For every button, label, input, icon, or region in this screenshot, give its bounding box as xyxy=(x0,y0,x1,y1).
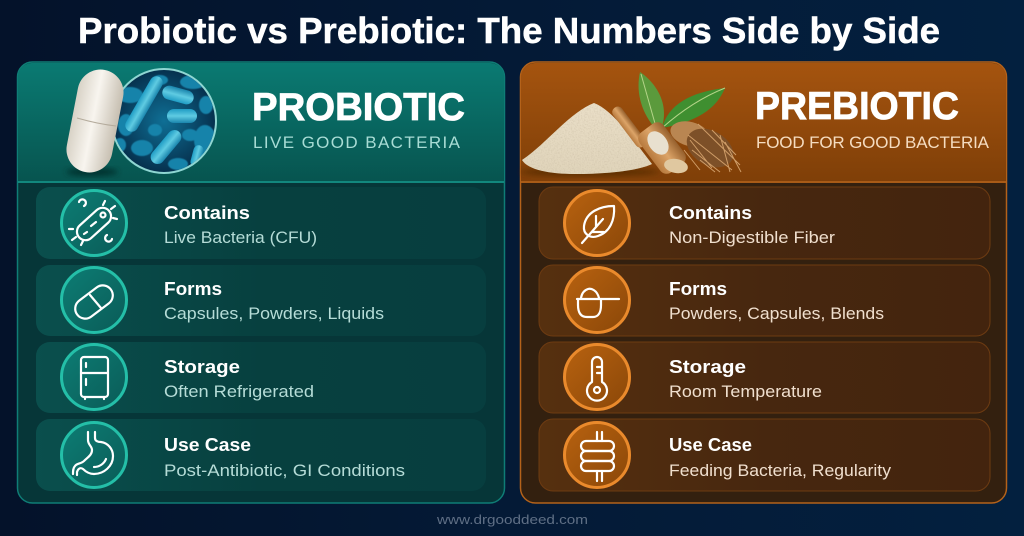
row: contains xyxy=(36,187,486,259)
panel background xyxy=(520,62,1006,503)
value: Capsules, Powders, Liquids xyxy=(164,304,384,323)
row: use case xyxy=(36,419,486,491)
label: Forms xyxy=(164,279,222,299)
footer: website: www.drgooddeed.com xyxy=(436,512,588,527)
label: Forms xyxy=(669,279,727,299)
label: Use Case xyxy=(164,435,251,455)
panel: prebiotic xyxy=(520,62,1006,503)
value: Feeding Bacteria, Regularity xyxy=(669,461,892,480)
icon: measuring scoop xyxy=(564,268,630,332)
row: forms xyxy=(539,265,990,336)
illustration: leaves xyxy=(639,72,725,128)
value: Live Bacteria (CFU) xyxy=(164,228,317,247)
illustration: bacteria magnified in a circle xyxy=(112,69,216,173)
icon: capsule xyxy=(62,268,126,332)
panel header band xyxy=(521,63,1006,182)
illustration: root xyxy=(668,117,741,175)
row: storage xyxy=(36,342,486,413)
icon: intestines xyxy=(564,422,630,488)
value: Powders, Capsules, Blends xyxy=(669,304,884,323)
subheading: FOOD FOR GOOD BACTERIA xyxy=(756,133,990,152)
heading: PROBIOTIC xyxy=(252,86,465,129)
panel background xyxy=(18,62,504,503)
value: Often Refrigerated xyxy=(164,382,314,401)
value: Non-Digestible Fiber xyxy=(669,228,835,247)
row: use case xyxy=(539,419,990,491)
title: Probiotic vs Prebiotic: The Numbers Side by Side xyxy=(78,10,940,51)
illustration: powder pile xyxy=(520,103,660,176)
subheading: LIVE GOOD BACTERIA xyxy=(253,133,461,152)
value: Room Temperature xyxy=(669,382,822,401)
icon: leaf xyxy=(564,190,630,256)
label: Storage xyxy=(669,357,746,377)
row: storage xyxy=(539,342,990,413)
panel: probiotic xyxy=(18,62,504,503)
illustration: wooden scoop xyxy=(610,105,689,177)
row: contains xyxy=(539,187,990,259)
icon: thermometer xyxy=(564,344,630,410)
icon: stomach xyxy=(62,422,126,488)
icon: bacterium xyxy=(62,190,126,256)
label: Use Case xyxy=(669,435,752,455)
icon: refrigerator xyxy=(62,344,126,410)
row: forms xyxy=(36,265,486,336)
heading: PREBIOTIC xyxy=(755,85,959,128)
panel header band xyxy=(18,63,504,182)
label: Storage xyxy=(164,357,240,377)
label: Contains xyxy=(164,203,250,223)
illustration: capsule xyxy=(63,66,127,176)
value: Post-Antibiotic, GI Conditions xyxy=(164,461,405,480)
label: Contains xyxy=(669,203,752,223)
